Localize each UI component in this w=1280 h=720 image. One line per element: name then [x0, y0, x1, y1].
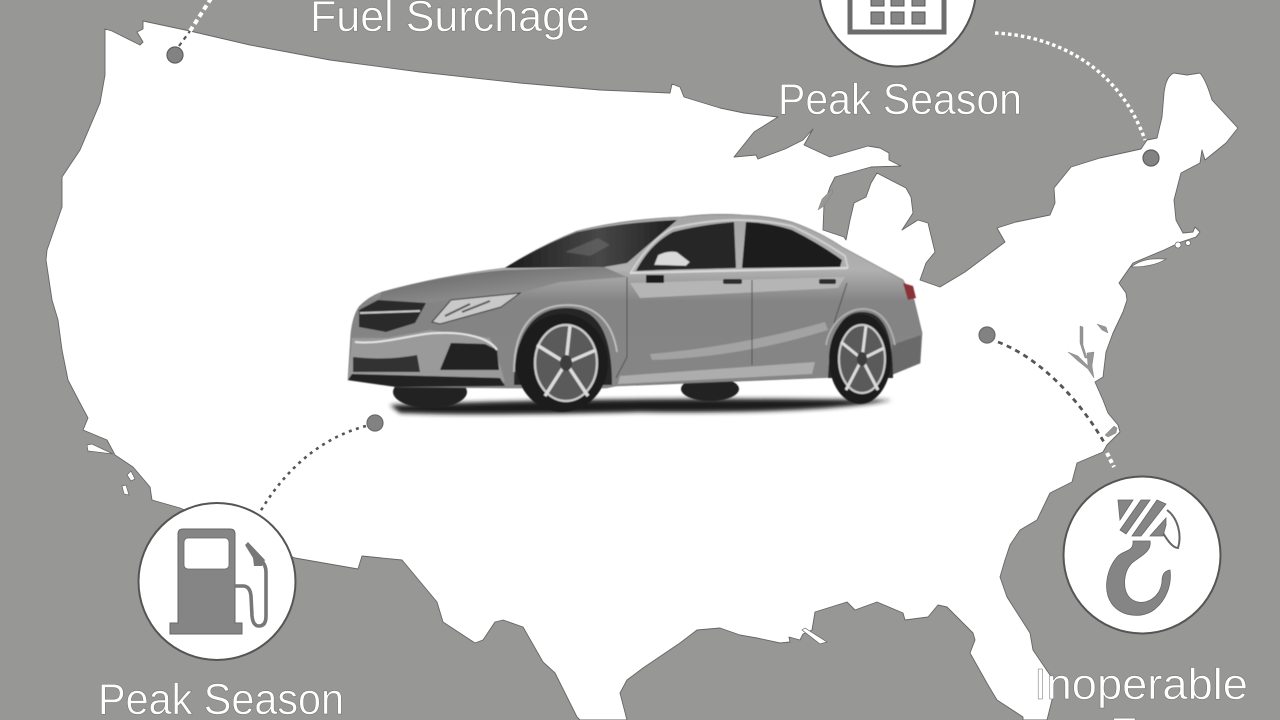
callout line: left	[260, 415, 383, 512]
label: Inoperable: Inoperable	[1034, 660, 1248, 709]
far wheels	[393, 376, 739, 408]
front wheel arch	[514, 308, 612, 385]
icon: calendar badge	[819, 0, 976, 66]
rear wheel arch	[828, 312, 893, 378]
front wheel	[516, 314, 608, 412]
door handles	[723, 279, 742, 284]
window trim	[630, 220, 848, 274]
label: Peak Season top: Peak Season	[778, 75, 1022, 124]
ground shadow	[390, 399, 892, 414]
door shoulder highlights	[630, 277, 845, 298]
car body	[348, 214, 922, 388]
bumper	[348, 330, 505, 385]
rear wheel	[829, 314, 891, 404]
windshield	[505, 220, 677, 268]
rear trim	[891, 335, 921, 375]
side windows	[636, 222, 736, 271]
hood	[378, 267, 627, 303]
door lines	[616, 277, 847, 378]
icon: tow hook badge	[1064, 476, 1220, 634]
callout line: top right	[995, 33, 1159, 166]
wheel arch highlights	[514, 305, 617, 372]
icon: fuel pump badge	[138, 503, 296, 660]
map islands	[87, 240, 1190, 644]
callout line: top left	[167, 0, 212, 63]
car photo illustration	[348, 214, 922, 414]
tail light	[903, 283, 916, 300]
map inlets and bays	[818, 189, 1117, 437]
grille	[359, 300, 426, 332]
callout line: right	[979, 327, 1114, 467]
mirror	[654, 251, 690, 266]
headlight	[432, 293, 520, 324]
